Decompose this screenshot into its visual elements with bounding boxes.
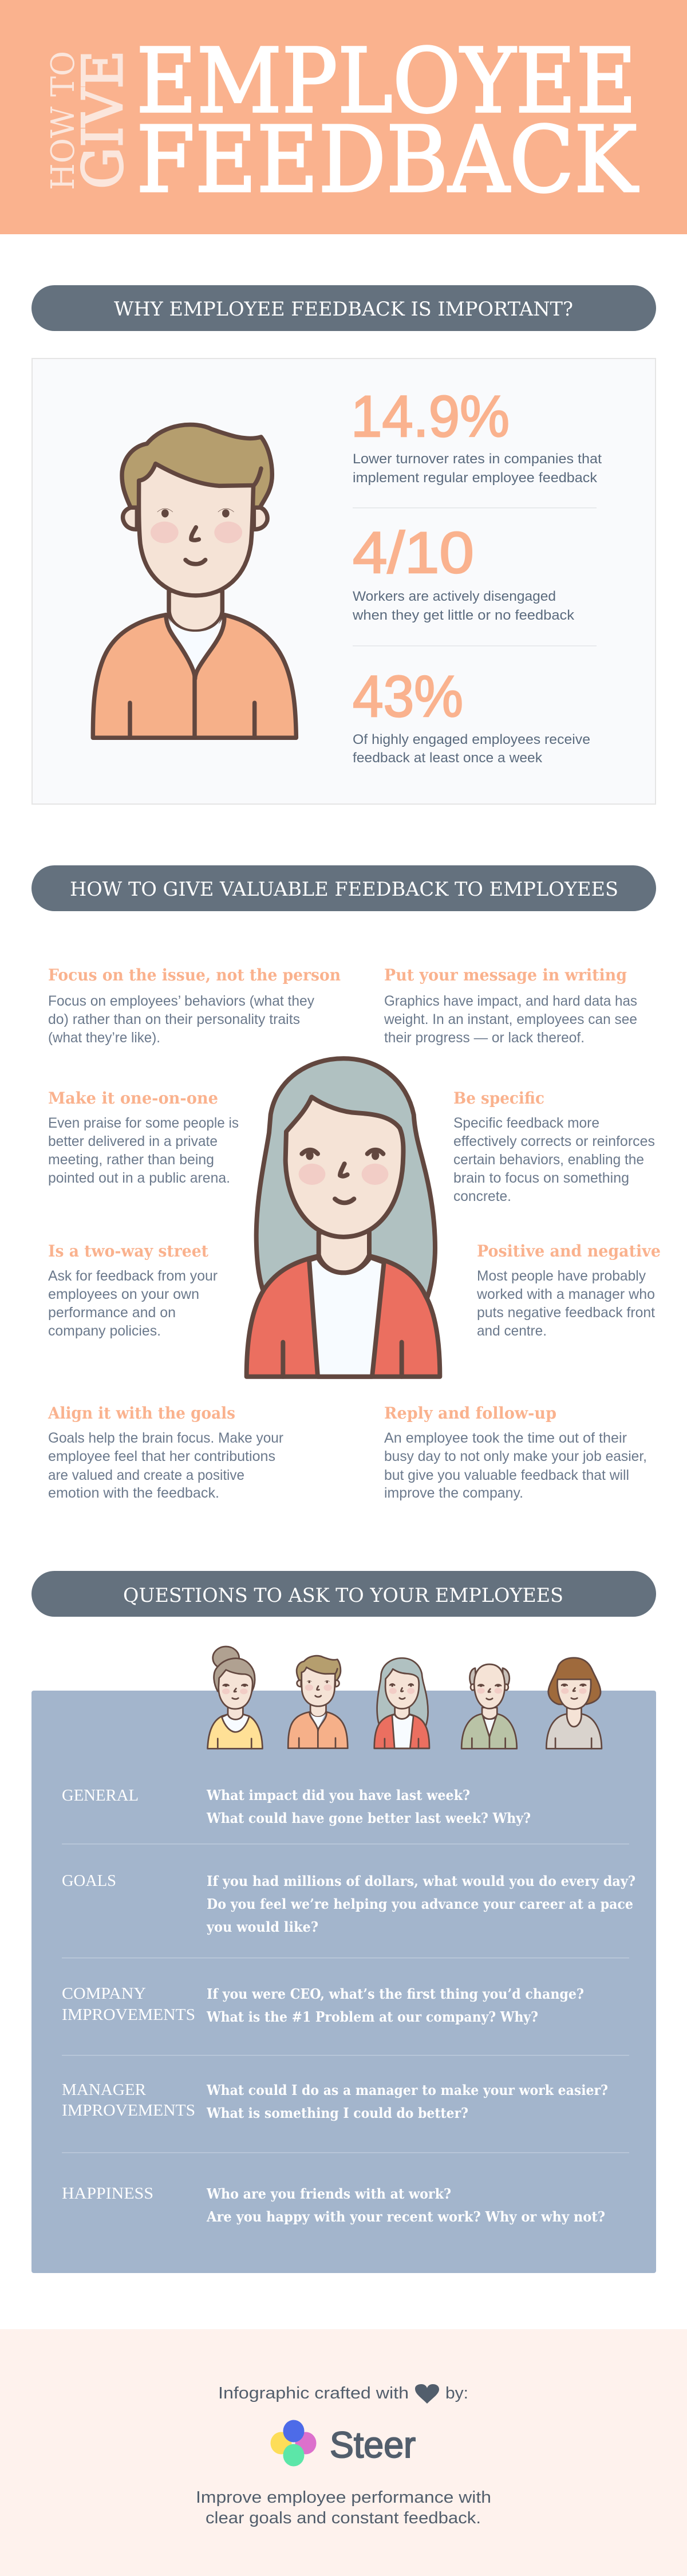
stat: 4/10 <box>352 520 575 623</box>
tip: positive and negative: and centre. <box>477 1323 547 1339</box>
section heading: questions to ask <box>31 1571 656 1617</box>
credit line: Infographic crafted with <box>218 2384 409 2402</box>
tip: make it one-on-one: meeting, rather than being <box>48 1152 214 1168</box>
tip: be specific: concrete. <box>453 1188 511 1204</box>
tip: make it one-on-one: Make it one-on-one <box>48 1089 218 1108</box>
tagline: clear goals and constant feedback. <box>206 2509 481 2527</box>
logo: steer <box>270 2420 416 2466</box>
tip: two-way street <box>48 1242 218 1339</box>
row: company improvements: If you were CEO, what’s the first thing you’d change? <box>207 1986 584 2002</box>
section heading: why feedback is important: WHY EMPLOYEE FEEDBACK IS IMPORTANT? <box>114 298 573 321</box>
icon: woman illustration <box>244 1056 442 1379</box>
row: manager improvements: What is something I could do better? <box>206 2105 468 2121</box>
panel: statistics <box>32 359 656 804</box>
logo: steer: Steer <box>330 2424 416 2465</box>
row: general <box>62 1786 531 1826</box>
tip: reply and follow-up: An employee took the time out of their <box>384 1430 627 1446</box>
tip: focus on the issue: Focus on employees’ behaviors (what they <box>48 993 314 1009</box>
tip: put your message in writing: weight. In an instant, employees can see <box>384 1011 637 1027</box>
tip: be specific: Be specific <box>453 1089 544 1108</box>
row: goals: GOALS <box>62 1872 116 1890</box>
stat: 43%: feedback at least once a week <box>353 750 543 766</box>
tip: two-way street: performance and on <box>48 1305 176 1321</box>
section heading: how to give valuable feedback: HOW TO GIVE VALUABLE FEEDBACK TO EMPLOYEES <box>70 878 618 901</box>
stat: 4/10: Workers are actively disengaged <box>353 589 556 604</box>
subtitle: how to: HOW TO <box>45 51 82 190</box>
title: employee: EMPLOYEE <box>136 29 637 133</box>
row: manager improvements <box>62 2081 608 2121</box>
tip: be specific <box>453 1089 655 1204</box>
row: happiness: Who are you friends with at work? <box>206 2185 451 2202</box>
stat: 43% <box>353 664 590 766</box>
tip: focus on the issue: Focus on the issue, not the person <box>48 966 341 984</box>
icon: woman with bob haircut <box>546 1657 602 1750</box>
tip: two-way street: company policies. <box>48 1323 161 1339</box>
row: manager improvements: IMPROVEMENTS <box>62 2101 195 2120</box>
icon: young man <box>287 1655 349 1749</box>
tip: two-way street: Is a two-way street <box>48 1242 208 1261</box>
tip: two-way street: employees on your own <box>48 1286 199 1302</box>
header banner <box>0 0 687 234</box>
row: manager improvements: What could I do as a manager to make your work easier? <box>206 2082 608 2098</box>
stat: 43%: Of highly engaged employees receive <box>353 732 590 747</box>
row: goals <box>62 1872 635 1935</box>
tip: be specific: Specific feedback more <box>453 1115 599 1131</box>
panel: questions <box>31 1647 656 2273</box>
tip: put your message in writing: their progress — or lack thereof. <box>384 1030 585 1046</box>
section heading: how to give valuable feedback <box>31 865 656 911</box>
tagline <box>196 2488 491 2527</box>
tip: reply and follow-up: improve the company. <box>384 1485 523 1501</box>
tip: two-way street: Ask for feedback from your <box>48 1268 218 1284</box>
stat: 4/10: when they get little or no feedback <box>352 608 575 623</box>
row: general: What could have gone better last week? Why? <box>206 1810 531 1826</box>
icon: woman with long hair <box>373 1657 431 1749</box>
stat: 4/10: 4/10 <box>353 520 474 585</box>
subtitle: give: GIVE <box>71 50 135 189</box>
icon: heart <box>415 2384 439 2404</box>
tip: align it with the goals <box>48 1404 283 1501</box>
tip: put your message in writing: Put your message in writing <box>384 966 627 984</box>
row: company improvements: IMPROVEMENTS <box>62 2006 195 2024</box>
row: happiness: Are you happy with your recent work? Why or why not? <box>206 2208 605 2225</box>
icon: bald older man <box>460 1663 518 1750</box>
tip: be specific: brain to focus on something <box>453 1170 629 1186</box>
row: general: GENERAL <box>62 1786 139 1805</box>
section heading: questions to ask: QUESTIONS TO ASK TO YOUR EMPLOYEES <box>123 1584 563 1607</box>
row: general: What impact did you have last week? <box>206 1787 470 1803</box>
stat: 43%: 43% <box>353 664 463 729</box>
tip: be specific: effectively corrects or reinforces <box>453 1133 655 1149</box>
row: company improvements: COMPANY <box>62 1984 146 2003</box>
tip: make it one-on-one: pointed out in a public arena. <box>48 1170 230 1186</box>
credit line <box>218 2384 468 2404</box>
tip: positive and negative: Positive and negative <box>477 1242 661 1261</box>
tip: reply and follow-up: but give you valuable feedback that will <box>384 1467 629 1483</box>
row: manager improvements: MANAGER <box>62 2081 147 2099</box>
tip: reply and follow-up: Reply and follow-up <box>384 1404 556 1423</box>
credit line: by: <box>445 2384 468 2402</box>
tip: be specific: certain behaviors, enabling the <box>453 1152 644 1168</box>
row: goals: you would like? <box>206 1919 318 1935</box>
tip: positive and negative: Most people have probably <box>477 1268 646 1284</box>
stat: 14.9% <box>351 384 602 486</box>
tip: focus on the issue: (what they’re like). <box>48 1030 160 1046</box>
tip: put your message in writing <box>384 966 637 1046</box>
icon: woman with bun <box>207 1646 263 1750</box>
tip: align it with the goals: employee feel that her contributions <box>48 1448 275 1464</box>
stat: 14.9%: 14.9% <box>351 384 510 449</box>
tip: make it one-on-one <box>48 1089 239 1186</box>
row: happiness: HAPPINESS <box>62 2184 153 2203</box>
tip: reply and follow-up <box>384 1404 647 1501</box>
footer <box>0 2329 687 2576</box>
tip: reply and follow-up: busy day to not only make your job easier, <box>384 1448 647 1464</box>
section heading: why feedback is important <box>31 285 656 331</box>
tip: align it with the goals: emotion with the feedback. <box>48 1485 219 1501</box>
row: company improvements: What is the #1 Problem at our company? Why? <box>206 2008 538 2025</box>
row: goals: Do you feel we’re helping you advance your career at a pace <box>207 1896 633 1912</box>
tip: focus on the issue <box>48 966 341 1046</box>
row: happiness <box>62 2184 605 2225</box>
stat: 14.9%: Lower turnover rates in companies that <box>353 451 602 467</box>
stat: 14.9%: implement regular employee feedback <box>353 470 598 486</box>
row: company improvements <box>62 1984 584 2025</box>
icon: man illustration <box>90 423 299 740</box>
tip: make it one-on-one: Even praise for some people is <box>48 1115 239 1131</box>
tip: positive and negative <box>476 1242 661 1339</box>
tip: align it with the goals: Goals help the brain focus. Make your <box>48 1430 283 1446</box>
tip: positive and negative: worked with a manager who <box>476 1286 655 1302</box>
tip: put your message in writing: Graphics have impact, and hard data has <box>384 993 637 1009</box>
tagline: Improve employee performance with <box>196 2488 491 2507</box>
tip: make it one-on-one: better delivered in a private <box>48 1133 218 1149</box>
tip: align it with the goals: Align it with the goals <box>48 1404 235 1423</box>
tip: focus on the issue: do) rather than on their personality traits <box>48 1011 300 1027</box>
row: goals: If you had millions of dollars, what would you do every day? <box>207 1873 635 1889</box>
tip: positive and negative: puts negative feedback front <box>477 1305 655 1321</box>
tip: align it with the goals: are valued and create a positive <box>48 1467 244 1483</box>
title: feedback: FEEDBACK <box>136 107 639 213</box>
